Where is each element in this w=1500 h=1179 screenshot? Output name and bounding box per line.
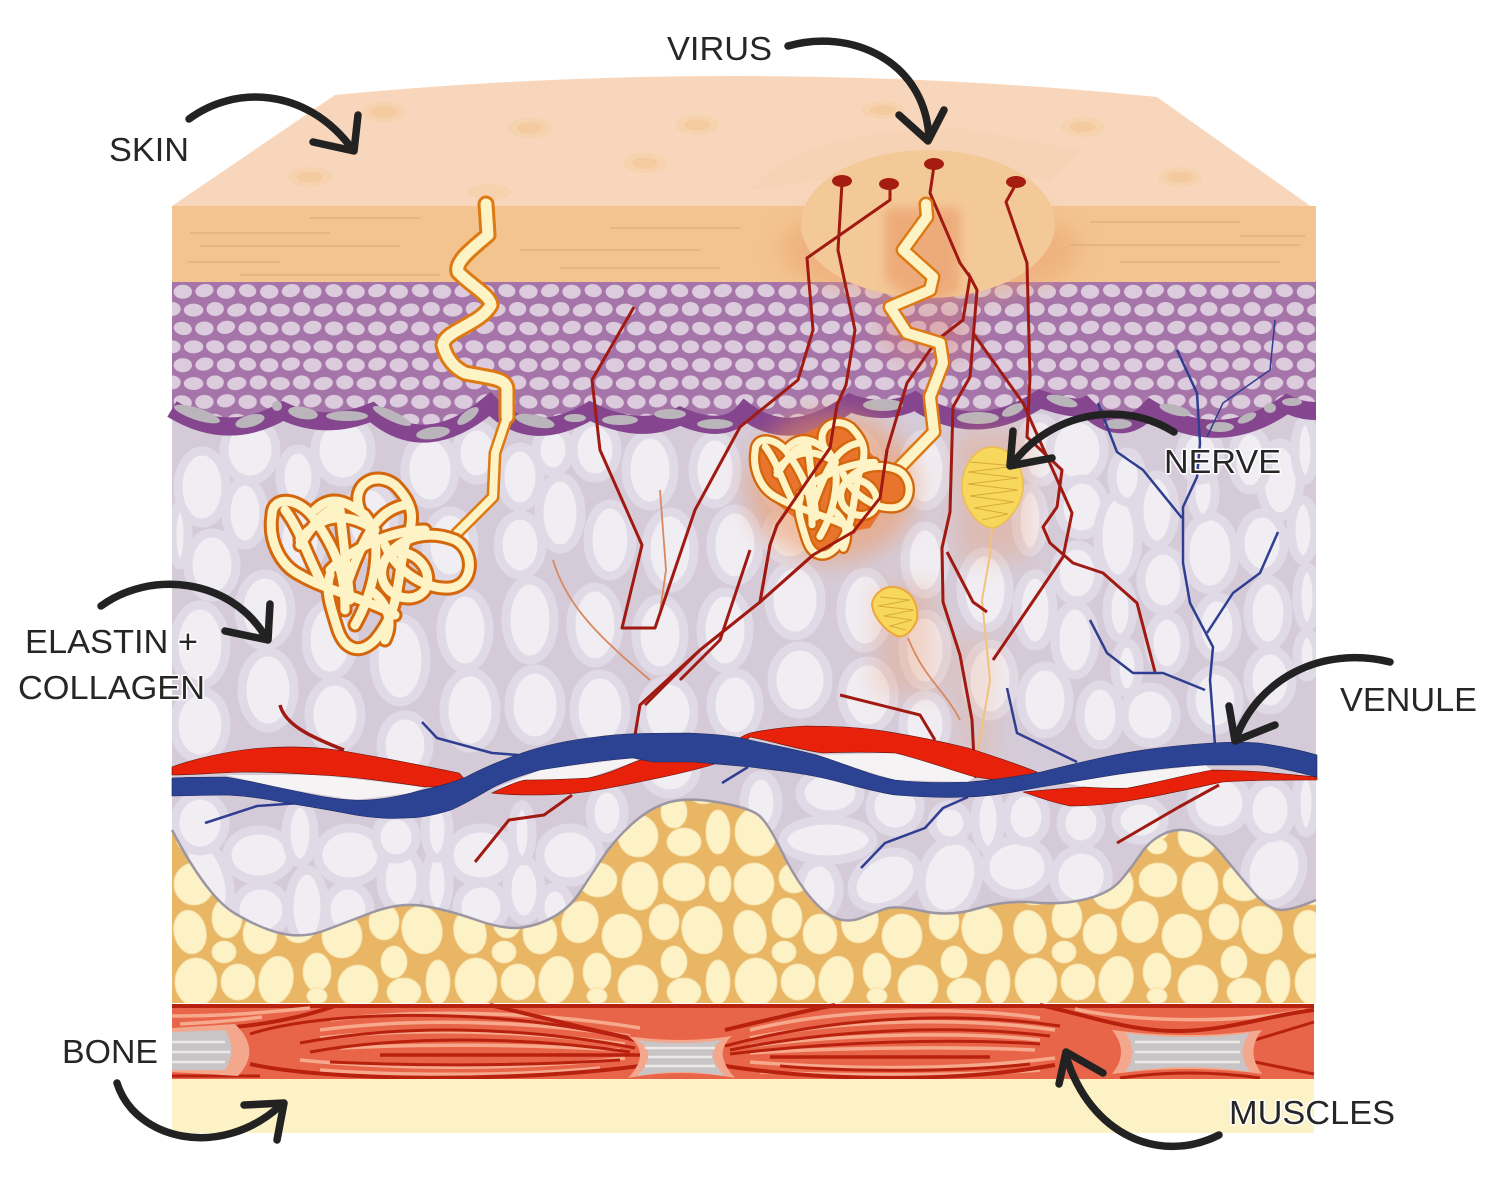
nerve fibre right — [890, 204, 943, 467]
infected area: lesion with inflammation — [780, 150, 1080, 364]
layer: elastin and collagen dermis — [172, 400, 1317, 944]
artery: red vessel — [172, 726, 1317, 806]
glow: inflamed gland and sacs — [747, 412, 1030, 770]
venule: blue vessel — [172, 733, 1317, 818]
arrow: muscles — [1059, 1052, 1219, 1146]
orange gland fill — [752, 420, 908, 556]
arrow: bone — [117, 1083, 284, 1140]
label: bone: BONE — [62, 1033, 158, 1070]
tendon: centre — [628, 1036, 735, 1078]
pale gaps between vessels — [226, 753, 1212, 800]
label: nerve: NERVE — [1164, 443, 1281, 480]
muscle fibres: light — [172, 1008, 1305, 1075]
tendon: left — [172, 1024, 249, 1076]
gland left: nerve and tangle — [271, 204, 507, 649]
layer: subcutaneous fat — [172, 785, 1316, 1003]
gland right: nerve and tangle — [752, 204, 943, 602]
arrow: skin — [189, 97, 358, 151]
layer: skin surface — [172, 76, 1316, 230]
skin cross-section illustration — [172, 76, 1317, 1133]
label: muscles: MUSCLES — [1229, 1094, 1395, 1131]
layer: epidermis — [172, 206, 1316, 290]
capillaries: red — [280, 166, 1219, 862]
arrow: elastin and collagen — [101, 584, 270, 640]
tangle right — [755, 423, 909, 555]
layer: purple cell layer — [172, 282, 1316, 443]
nerve sac: small — [872, 587, 917, 636]
purple basement membrane — [172, 392, 1316, 441]
muscle layer — [172, 1004, 1314, 1079]
label: elastin + collagen: ELASTIN + — [25, 623, 198, 660]
tangle left — [271, 479, 469, 649]
virus dots on skin surface — [832, 158, 1026, 190]
capillaries: thin orange — [553, 490, 960, 720]
label: virus: VIRUS — [667, 30, 772, 67]
label: elastin + collagen: COLLAGEN — [18, 669, 205, 706]
label: elastin + collagen — [18, 623, 205, 706]
layer: bone — [172, 1079, 1314, 1133]
nerve fibre left — [443, 204, 507, 533]
nerve thread: pale orange — [978, 528, 992, 778]
tendon: right — [1112, 1030, 1262, 1074]
label: venule: VENULE — [1340, 681, 1477, 718]
capillaries over gland — [760, 405, 887, 602]
label: skin: SKIN — [109, 131, 189, 168]
arrow: venule — [1229, 658, 1390, 741]
muscle fibres: dark — [172, 1005, 1314, 1078]
arrow: virus — [788, 41, 944, 141]
nerve sac: large — [962, 447, 1023, 528]
venules: thin blue branches — [205, 320, 1278, 868]
arrow: nerve — [1010, 414, 1174, 466]
